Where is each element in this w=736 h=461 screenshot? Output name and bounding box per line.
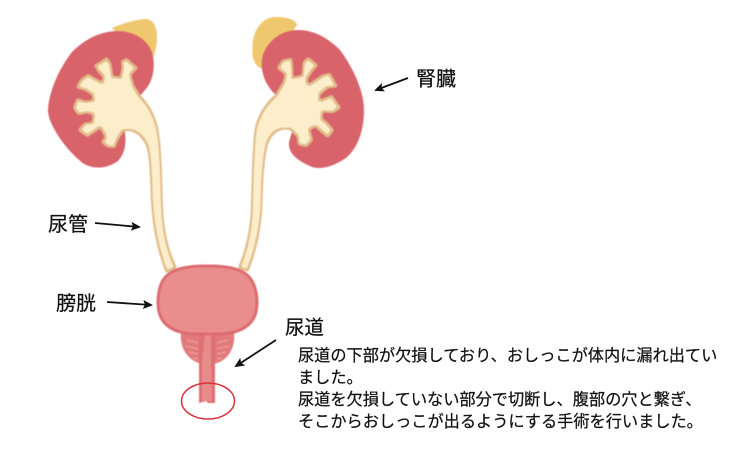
illustration: urinary organs xyxy=(48,17,364,403)
icon: left adrenal gland xyxy=(112,19,157,58)
icon: bladder xyxy=(158,266,257,334)
icon: right renal pelvis and ureter xyxy=(238,57,341,272)
icon: prostate xyxy=(181,332,234,364)
arrow: urethra xyxy=(236,340,276,366)
icon: urethra xyxy=(199,330,215,403)
text block: surgery explanation xyxy=(298,347,717,431)
label: ureter: 尿管 xyxy=(48,213,88,236)
label: urethra: 尿道 xyxy=(285,317,324,339)
icon: right kidney xyxy=(262,30,364,168)
callout: red circle on urethra xyxy=(182,383,234,419)
icon: left kidney xyxy=(48,31,154,168)
label: bladder: 膀胱 xyxy=(56,292,96,315)
arrow: ureter xyxy=(95,223,139,227)
text block: surgery explanation: 尿道を欠損していない部分で切断し、腹部の穴と繋ぎ、 xyxy=(298,391,701,409)
label: kidney: 腎臓 xyxy=(416,68,456,90)
icon: urethra inner xyxy=(202,332,212,401)
arrow: bladder xyxy=(107,302,151,305)
text block: surgery explanation: 尿道の下部が欠損しており、おしっこが体内に漏れ出てい xyxy=(298,347,717,365)
icon: right adrenal gland xyxy=(252,17,297,69)
text block: surgery explanation: そこからおしっこが出るようにする手術を行いました。 xyxy=(298,413,703,431)
icon: left renal pelvis and ureter xyxy=(73,57,177,273)
arrow: kidney xyxy=(376,78,408,90)
text block: surgery explanation: ました。 xyxy=(298,369,363,387)
